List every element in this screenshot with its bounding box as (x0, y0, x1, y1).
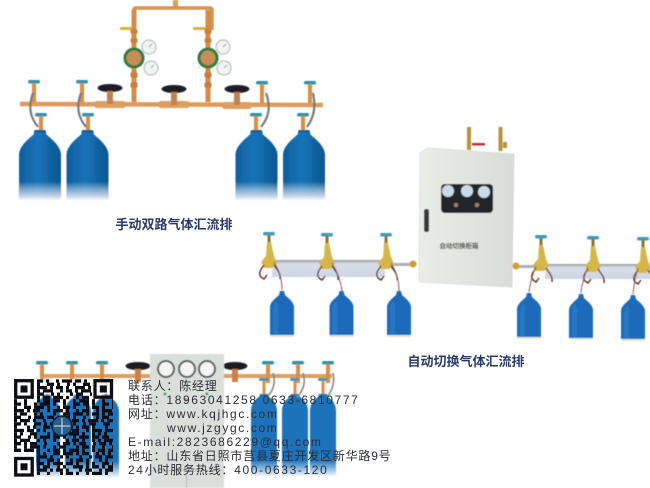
hoses (274, 262, 638, 294)
QR centre logo (52, 416, 72, 436)
manifold pipe (20, 101, 323, 109)
left-side valves (260, 232, 397, 280)
website 1: 网址：www.kqjhgc.com (128, 407, 278, 421)
copper pipe (40, 374, 332, 378)
website 2: www.jzgygc.com (166, 421, 278, 435)
cabinet label: 自动切换柜箱 (440, 241, 479, 250)
icon: right pressure regulator (199, 10, 231, 102)
centre control panel (150, 354, 224, 488)
cylinder valves and hoses (28, 80, 316, 135)
left steel manifold (272, 260, 411, 277)
brass connectors (410, 260, 520, 270)
right steel manifold (518, 264, 650, 279)
diagram: cropped third manifold behind contact block (34, 354, 336, 488)
icon: left pressure regulator (125, 10, 158, 102)
email: E-mail:2823686229@qq.com (128, 435, 322, 449)
QR data modules (14, 381, 113, 473)
right-side valves (532, 235, 650, 284)
blue gas cylinders (18, 130, 326, 201)
address: 地址：山东省日照市莒县夏庄开发区新华路9号 (128, 448, 391, 463)
small blue cylinders, left (270, 291, 411, 337)
diagram: automatic switching gas manifold (260, 127, 650, 341)
upper valves (36, 361, 334, 383)
icon: shut-off valves (98, 84, 250, 105)
blue cylinders, left (34, 379, 119, 478)
blue cylinders, right (251, 373, 336, 477)
top copper pipe frame (120, 0, 212, 30)
QR code (14, 379, 113, 477)
small blue cylinders, right (517, 293, 645, 341)
control cabinet (419, 148, 514, 287)
QR finder patterns (16, 381, 112, 475)
hotline: 24小时服务热线：400-0633-120 (128, 462, 328, 477)
door handle (424, 209, 429, 232)
caption: automatic manifold: 自动切换气体汇流排 (407, 354, 525, 369)
contact information (128, 378, 391, 477)
gauge panel (441, 184, 493, 213)
telephone: 电话：18963041258 0633-6810777 (128, 393, 359, 407)
contact person: 联系人：陈经理 (128, 378, 218, 393)
cabinet inlet pipes (467, 127, 507, 151)
caption: manual manifold: 手动双路气体汇流排 (115, 217, 233, 232)
diagram: manual dual-line gas manifold (18, 0, 326, 201)
